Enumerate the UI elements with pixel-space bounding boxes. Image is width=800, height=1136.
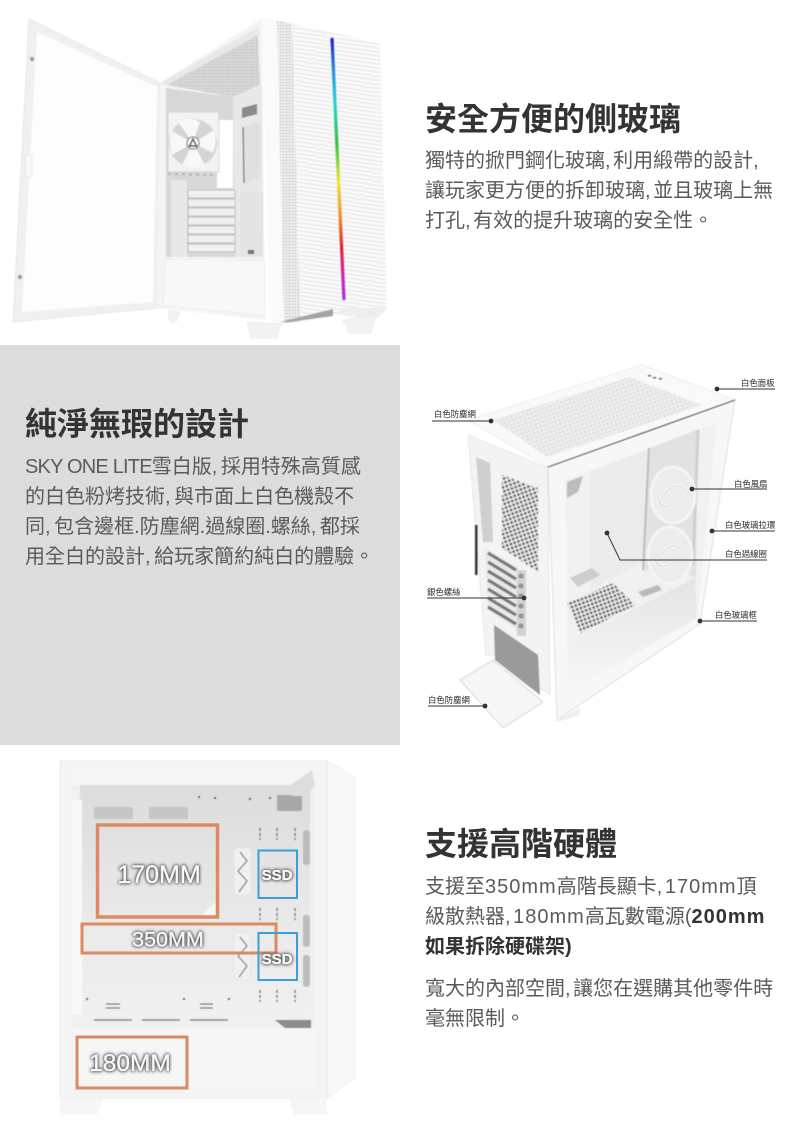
callout: 白色過線圈: 白色過線圈 <box>725 549 767 559</box>
top panel <box>468 365 735 467</box>
180MM power supply zone <box>77 1037 187 1088</box>
case feet <box>168 311 376 338</box>
callout: 白色防塵網 top <box>432 409 493 423</box>
SSD bay lower <box>258 933 297 980</box>
text block: pure design: 的白色粉烤技術, 與市面上白色機殼不 <box>25 486 354 508</box>
illustration: white case with open glass door <box>13 17 387 338</box>
callout: 銀色螺絲: 銀色螺絲 <box>427 587 461 597</box>
text block: hardware support: 如果拆除硬碟架) <box>425 936 572 958</box>
fan <box>168 112 219 175</box>
callout: 白色防塵網 bottom: 白色防塵網 <box>428 695 470 705</box>
motherboard tray <box>72 770 315 1028</box>
text block: interior space: 毫無限制。 <box>425 1008 525 1030</box>
170MM CPU cooler zone <box>98 825 218 917</box>
PSU shroud <box>73 1028 315 1090</box>
callout: 白色玻璃框 <box>698 610 757 623</box>
case body <box>460 365 735 728</box>
text block: side glass: 讓玩家更方便的拆卸玻璃, 並且玻璃上無 <box>425 180 773 202</box>
text block: interior space: 寬大的內部空間, 讓您在選購其他零件時 <box>425 978 773 1000</box>
callout: 白色玻璃框: 白色玻璃框 <box>715 610 757 620</box>
text block: pure design: 用全白的設計, 給玩家簡約純白的體驗。 <box>25 546 374 568</box>
case interior <box>157 18 265 320</box>
RGB light strip <box>332 38 344 300</box>
text block: side glass <box>425 150 773 232</box>
180MM power supply zone: 180MM <box>89 1050 171 1077</box>
front mesh panel <box>262 17 387 325</box>
illustration: labelled white case <box>427 365 776 728</box>
170MM CPU cooler zone: 170MM <box>117 861 201 889</box>
heading: side glass: 安全方便的側玻璃 <box>425 101 681 137</box>
text block: hardware support: 級散熱器, 180mm高瓦數電源(200mm <box>425 906 765 928</box>
text block: pure design: SKY ONE LITE雪白版, 採用特殊高質感 <box>25 456 361 478</box>
350MM graphics card zone <box>82 924 276 953</box>
PCI slots <box>188 190 235 252</box>
callout: 銀色螺絲 <box>427 587 526 600</box>
illustration: case clearance diagram <box>60 761 355 1115</box>
panel: grey background <box>0 345 400 745</box>
glass door <box>13 19 160 322</box>
text block: interior space <box>425 978 773 1030</box>
case foot <box>556 708 580 722</box>
heading: high-end hardware: 支援高階硬體 <box>425 826 617 862</box>
text block: hardware support: 支援至350mm高階長顯卡, 170mm頂 <box>425 876 757 898</box>
text block: pure design <box>25 456 374 568</box>
callout: 白色風扇: 白色風扇 <box>734 479 768 489</box>
callout: 白色面板: 白色面板 <box>741 378 775 388</box>
text block: pure design: 同, 包含邊框.防塵網.過線圈.螺絲, 都採 <box>25 516 360 538</box>
callout: 白色玻璃拉環: 白色玻璃拉環 <box>725 520 776 530</box>
callout: 白色面板 <box>715 378 775 391</box>
callout: 白色玻璃拉環 <box>710 520 776 533</box>
callout: 白色過線圈 <box>605 531 767 560</box>
glass side frame <box>548 400 735 720</box>
350MM graphics card zone: 350MM <box>132 928 204 952</box>
dust filter <box>460 660 543 728</box>
text block: side glass: 打孔, 有效的提升玻璃的安全性。 <box>425 210 713 232</box>
SSD bay upper <box>258 850 297 898</box>
heading: pure design: 純淨無瑕的設計 <box>25 406 249 442</box>
SSD bay upper: SSD <box>262 867 293 884</box>
power supply shroud <box>163 259 265 316</box>
callout: 白色防塵網 top: 白色防塵網 <box>434 409 476 419</box>
callout: 白色風扇 <box>690 479 768 491</box>
text block: hardware support <box>425 876 765 958</box>
SSD bay lower: SSD <box>262 951 293 968</box>
text block: side glass: 獨特的掀門鋼化玻璃, 利用緞帶的設計, <box>425 150 759 172</box>
callout: 白色防塵網 bottom <box>428 695 487 708</box>
rear side <box>468 435 550 695</box>
fans <box>643 430 698 583</box>
case body <box>60 761 355 1115</box>
